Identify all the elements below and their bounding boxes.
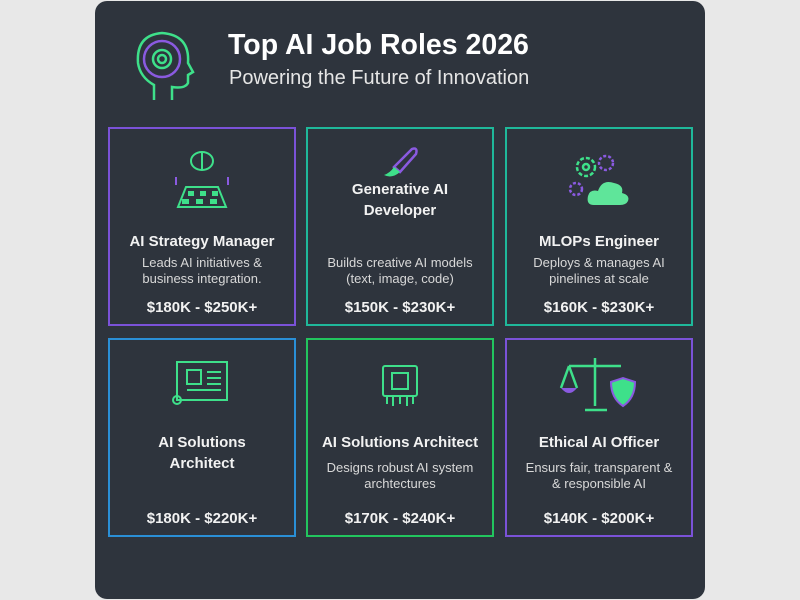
card: AI Solutions Architect (blueprint): Architect xyxy=(169,455,235,472)
card: Generative AI Developer: Generative AI xyxy=(352,181,448,198)
card: AI Solutions Architect (chip): $170K - $240K+ xyxy=(345,510,455,527)
card: Generative AI Developer xyxy=(306,127,494,326)
icon: circuit chip xyxy=(382,365,418,406)
card: Generative AI Developer: (text, image, code) xyxy=(346,271,454,286)
card: MLOps Engineer: Deploys & manages AI xyxy=(533,255,665,270)
card: AI Solutions Architect (blueprint): $180K - $220K+ xyxy=(147,510,257,527)
card: Generative AI Developer: Developer xyxy=(364,202,436,219)
panel: background xyxy=(95,1,705,599)
card: AI Strategy Manager xyxy=(108,127,296,326)
icon: brain on chessboard xyxy=(175,151,229,208)
card: AI Solutions Architect (chip) xyxy=(306,338,494,537)
card: Ethical AI Officer: Ensurs fair, transparent & xyxy=(526,460,672,475)
icon: scales and shield xyxy=(560,358,636,412)
card: AI Solutions Architect (chip): Designs robust AI system xyxy=(327,460,473,475)
icon: blueprint scroll xyxy=(172,361,228,405)
card: AI Strategy Manager: business integration. xyxy=(142,271,262,286)
card: AI Solutions Architect (chip): archtectures xyxy=(364,476,436,491)
card: Ethical AI Officer: Ethical AI Officer xyxy=(539,434,659,451)
card: AI Strategy Manager: Leads AI initiatives & xyxy=(142,255,262,270)
subtitle: Powering the Future of Innovation xyxy=(229,67,529,89)
card: MLOps Engineer: pinelines at scale xyxy=(549,271,649,286)
card: Generative AI Developer: $150K - $230K+ xyxy=(345,299,455,316)
card: AI Solutions Architect (blueprint) xyxy=(108,338,296,537)
card: MLOps Engineer: $160K - $230K+ xyxy=(544,299,654,316)
icon: gears and cloud xyxy=(568,154,628,205)
icon: head with gear xyxy=(136,32,195,100)
card: MLOps Engineer: MLOPs Engineer xyxy=(539,233,659,250)
card: AI Solutions Architect (chip): AI Solutions Architect xyxy=(322,434,478,451)
card: AI Strategy Manager: $180K - $250K+ xyxy=(147,299,257,316)
card: MLOps Engineer xyxy=(505,127,693,326)
card: AI Strategy Manager: AI Strategy Manager xyxy=(129,233,275,250)
card: Ethical AI Officer xyxy=(505,338,693,537)
card: Ethical AI Officer: & responsible AI xyxy=(552,476,646,491)
card: Ethical AI Officer: $140K - $200K+ xyxy=(544,510,654,527)
card: Generative AI Developer: Builds creative AI models xyxy=(327,255,473,270)
title: Top AI Job Roles 2026 xyxy=(228,29,529,61)
card: AI Solutions Architect (blueprint): AI Solutions xyxy=(158,434,246,451)
icon: paintbrush xyxy=(384,147,418,176)
